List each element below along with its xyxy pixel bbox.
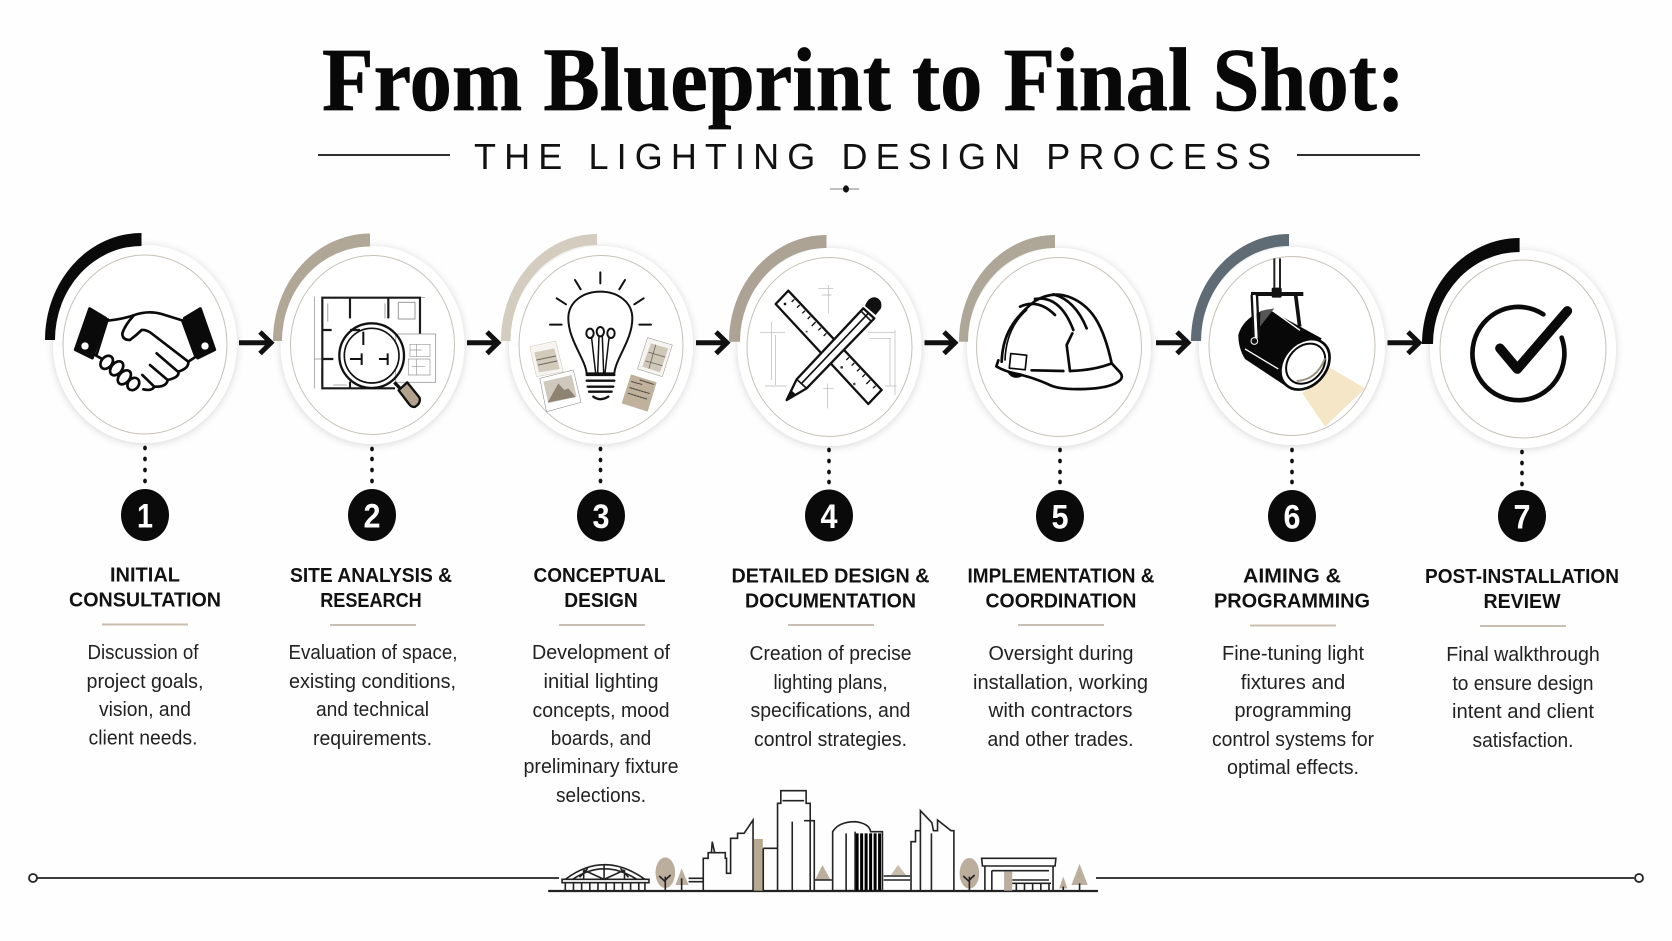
number badge: 6 bbox=[1284, 498, 1300, 536]
step description: lighting plans, bbox=[774, 672, 888, 694]
step description: programming bbox=[1234, 700, 1352, 722]
step heading: DESIGN bbox=[564, 590, 638, 612]
step heading: DETAILED DESIGN & bbox=[732, 566, 930, 588]
step heading bbox=[968, 566, 1154, 612]
step heading: COORDINATION bbox=[986, 590, 1136, 612]
step description: client needs. bbox=[88, 728, 198, 750]
panel: step 7 post-installation review bbox=[1422, 238, 1619, 752]
step heading bbox=[1214, 566, 1370, 612]
icon: light bulb with mood board bbox=[530, 272, 672, 412]
step description: selections. bbox=[556, 785, 646, 807]
step heading: PROGRAMMING bbox=[1214, 590, 1370, 612]
panel: step 5 implementation bbox=[959, 235, 1154, 751]
circle frame bbox=[967, 248, 1151, 446]
icon: ruler and pencil bbox=[760, 285, 897, 408]
step description: Evaluation of space, bbox=[288, 642, 458, 664]
progress arc bbox=[959, 235, 1055, 342]
number badge: 3 bbox=[592, 498, 610, 536]
title: From Blueprint to Final Shot: bbox=[322, 31, 1405, 130]
step heading: CONCEPTUAL bbox=[534, 565, 666, 587]
subtitle: THE LIGHTING DESIGN PROCESS bbox=[474, 136, 1271, 177]
connector dots bbox=[1520, 450, 1524, 486]
step description bbox=[288, 642, 458, 750]
number badge bbox=[1036, 490, 1084, 542]
timeline base line bbox=[29, 874, 1643, 882]
step description: project goals, bbox=[86, 671, 204, 693]
progress arc bbox=[729, 235, 826, 342]
step description: intent and client bbox=[1452, 701, 1594, 723]
step description: Oversight during bbox=[988, 643, 1134, 665]
connector dots bbox=[599, 447, 602, 483]
circle frame bbox=[1199, 247, 1385, 445]
step description: existing conditions, bbox=[289, 671, 456, 693]
step description: fixtures and bbox=[1241, 672, 1345, 694]
step description: Development of bbox=[532, 642, 670, 664]
step description: and other trades. bbox=[988, 729, 1134, 751]
step description bbox=[1446, 644, 1600, 752]
step description: control strategies. bbox=[754, 729, 907, 751]
progress arc bbox=[45, 233, 142, 340]
step heading bbox=[290, 565, 452, 612]
step description: Fine-tuning light bbox=[1222, 643, 1364, 665]
step description: and technical bbox=[316, 699, 429, 721]
panel: step 2 site analysis bbox=[273, 234, 464, 750]
step heading: CONSULTATION bbox=[69, 590, 221, 612]
step description: satisfaction. bbox=[1472, 730, 1574, 752]
step description: vision, and bbox=[99, 699, 191, 721]
connector dots bbox=[1290, 448, 1294, 484]
step heading: REVIEW bbox=[1484, 591, 1561, 613]
arrow 3 bbox=[696, 332, 727, 354]
progress arc bbox=[501, 234, 597, 341]
panel: step 4 detailed design bbox=[729, 235, 930, 751]
connector dots bbox=[143, 446, 147, 483]
number badge bbox=[577, 490, 625, 542]
panel: step 3 conceptual design bbox=[501, 234, 693, 807]
step description: boards, and bbox=[551, 728, 651, 750]
number badge: 1 bbox=[137, 498, 153, 536]
step description: initial lighting bbox=[544, 671, 658, 693]
step description: requirements. bbox=[313, 728, 432, 750]
step heading: INITIAL bbox=[110, 564, 180, 586]
arrow 2 bbox=[467, 332, 498, 354]
arrow 4 bbox=[924, 332, 955, 354]
step description: Final walkthrough bbox=[1446, 644, 1600, 666]
progress arc bbox=[1191, 234, 1289, 341]
step heading bbox=[69, 564, 221, 612]
step description: to ensure design bbox=[1452, 673, 1594, 695]
number badge bbox=[348, 489, 396, 541]
step description: Discussion of bbox=[88, 642, 199, 664]
number badge: 2 bbox=[364, 498, 380, 536]
icon: check mark bbox=[1472, 307, 1567, 400]
step heading: RESEARCH bbox=[320, 590, 422, 612]
progress arc bbox=[273, 234, 370, 341]
step description: Creation of precise bbox=[750, 643, 912, 665]
step heading bbox=[732, 566, 930, 612]
panel: step 6 aiming and programming bbox=[1191, 234, 1385, 779]
icon: spotlight bbox=[1238, 258, 1365, 427]
circle frame bbox=[53, 245, 237, 443]
number badge bbox=[121, 489, 169, 541]
arrow 1 bbox=[239, 332, 271, 354]
step description bbox=[750, 643, 912, 751]
step heading: DOCUMENTATION bbox=[745, 590, 916, 612]
circle frame bbox=[280, 246, 464, 444]
step description bbox=[1212, 643, 1374, 779]
step description: with contractors bbox=[987, 700, 1132, 722]
connector dots bbox=[370, 447, 374, 483]
step description: installation, working bbox=[973, 672, 1148, 694]
step heading: POST-INSTALLATION bbox=[1425, 566, 1619, 588]
step description bbox=[973, 643, 1148, 751]
number badge: 4 bbox=[820, 498, 838, 536]
arrow 6 bbox=[1388, 332, 1419, 354]
step description: optimal effects. bbox=[1227, 757, 1359, 779]
step heading bbox=[1425, 566, 1619, 613]
step heading bbox=[534, 565, 666, 612]
icon: floor plan and magnifier bbox=[314, 297, 436, 409]
icon: handshake bbox=[75, 309, 215, 393]
number badge bbox=[1268, 490, 1316, 542]
circle frame bbox=[738, 248, 922, 446]
number badge: 5 bbox=[1052, 498, 1068, 536]
icon: hard hat bbox=[996, 294, 1122, 389]
number badge bbox=[1498, 490, 1546, 542]
connector dots bbox=[827, 448, 831, 484]
step description: concepts, mood bbox=[532, 700, 670, 722]
step heading: SITE ANALYSIS & bbox=[290, 565, 452, 587]
skyline illustration bbox=[548, 791, 1098, 891]
panel: step 1 initial consultation bbox=[45, 233, 237, 750]
step description: preliminary fixture bbox=[524, 756, 678, 778]
step heading: AIMING & bbox=[1243, 566, 1341, 588]
circle frame bbox=[1430, 250, 1616, 448]
circle frame bbox=[509, 246, 693, 444]
step description: control systems for bbox=[1212, 729, 1374, 751]
step description: specifications, and bbox=[750, 700, 910, 722]
step description bbox=[524, 642, 678, 807]
step heading: IMPLEMENTATION & bbox=[968, 566, 1154, 588]
connector dots bbox=[1058, 448, 1062, 484]
number badge: 7 bbox=[1514, 498, 1530, 536]
arrow 5 bbox=[1156, 332, 1188, 354]
progress arc bbox=[1422, 238, 1520, 344]
number badge bbox=[805, 490, 853, 542]
ornament bbox=[830, 185, 859, 193]
step description bbox=[86, 642, 204, 750]
